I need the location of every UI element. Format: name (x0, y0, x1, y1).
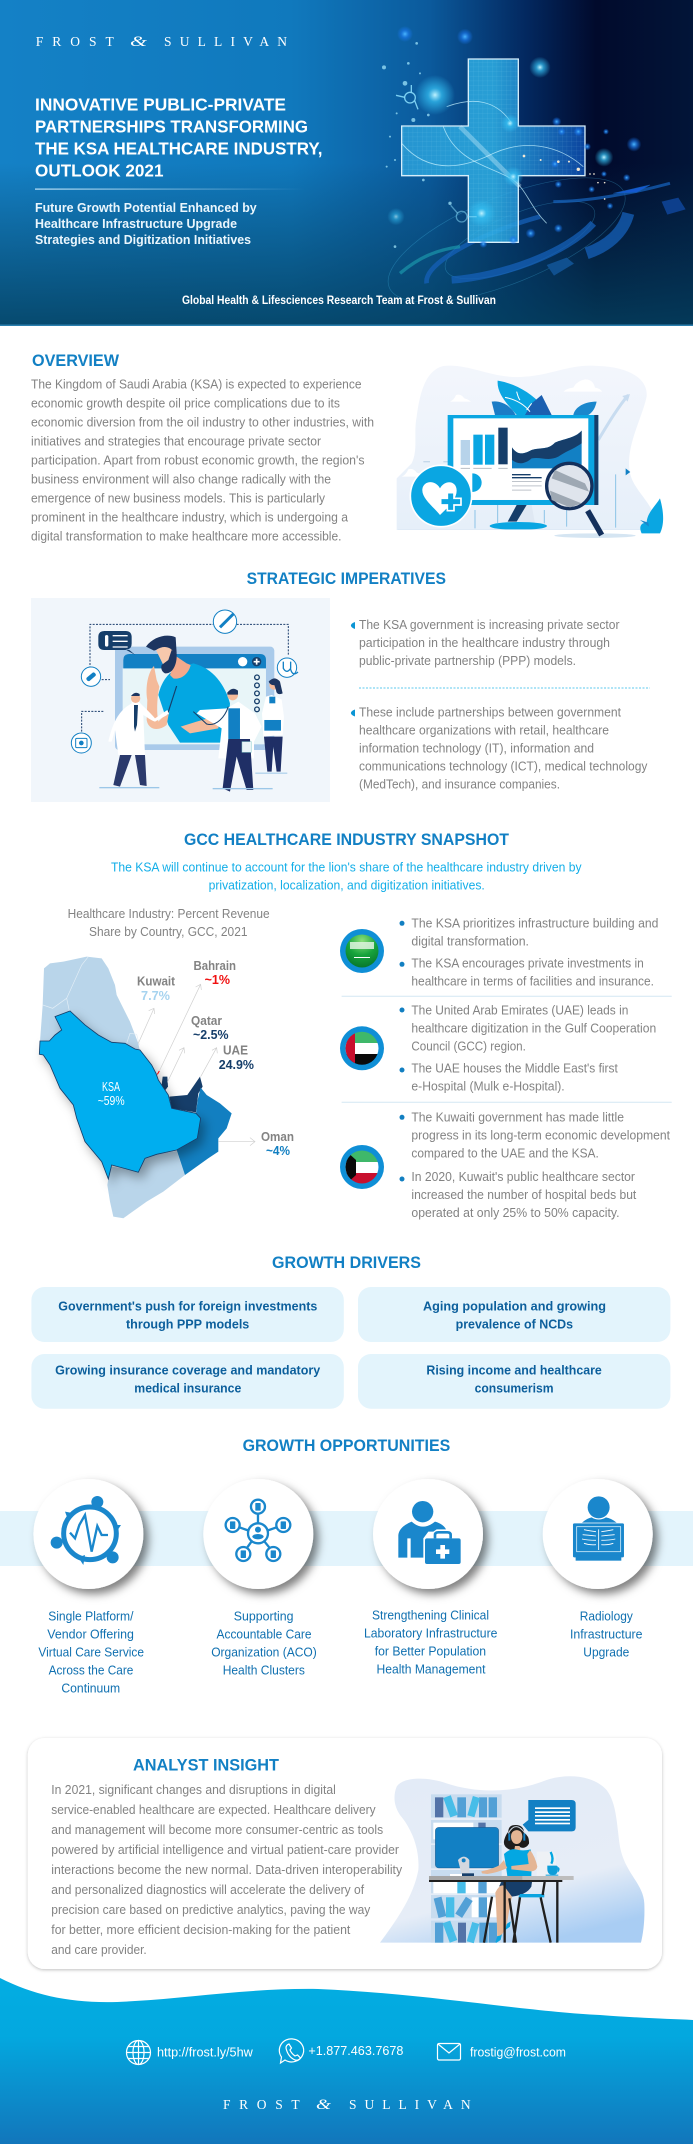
text block: overview body (31, 377, 374, 543)
country row: UAE: e-Hospital (Mulk e-Hospital). (411, 1079, 565, 1093)
label: Laboratory Infrastructure (364, 1626, 497, 1640)
label: Infrastructure (570, 1628, 643, 1642)
country row: Kuwait: operated at only 25% to 50% capacity. (411, 1206, 620, 1220)
label: Qatar (191, 1014, 228, 1042)
icon: globe (126, 2040, 150, 2064)
contact: email: frostig@frost.com (470, 2046, 566, 2060)
subtitle: Healthcare Infrastructure Upgrade (35, 216, 237, 231)
contact: website: http://frost.ly/5hw (157, 2046, 254, 2060)
logo: Frost & Sullivan footer: SULLIVAN (349, 2097, 471, 2112)
text block: analyst insight body: and management will become more consumer-centric as tools (51, 1823, 383, 1837)
label (364, 1608, 497, 1676)
bullet: PPP models: The KSA government is increasing private sector (359, 618, 620, 632)
label: Continuum (61, 1682, 120, 1696)
subtitle: Strategies and Digitization Initiatives (35, 232, 251, 247)
card: foreign investments (31, 1287, 344, 1342)
icon: doctor with medical case (373, 1479, 483, 1589)
country row: UAE: The United Arab Emirates (UAE) leads in (411, 1003, 628, 1017)
subtitle: Future Growth Potential Enhanced by (35, 200, 257, 215)
card: insurance coverage (31, 1354, 344, 1409)
title: PARTNERSHIPS TRANSFORMING (35, 117, 308, 137)
label: Supporting (234, 1610, 294, 1624)
panel: overview (31, 351, 663, 543)
country row: Kuwait: In 2020, Kuwait's public healthcare sector (411, 1170, 635, 1184)
label: Qatar: ~2.5% (193, 1028, 228, 1042)
icon: radiologist with x-ray (543, 1479, 653, 1589)
country row: Kuwait: progress in its long-term economic development (411, 1128, 670, 1142)
logo: Frost & Sullivan: & (130, 34, 147, 50)
card: rising income: consumerism (475, 1381, 554, 1395)
logo: Frost & Sullivan footer (223, 2097, 471, 2113)
logo: Frost & Sullivan footer: FROST (223, 2097, 300, 2112)
label: Upgrade (583, 1646, 629, 1660)
label: Kuwait (137, 975, 176, 1003)
country row: KSA: healthcare in terms of facilities and insurance. (411, 975, 654, 989)
text block: analyst insight body: interactions become the new normal. Data-driven interoperability (51, 1863, 403, 1877)
card: rising income (358, 1354, 670, 1409)
contact: website (126, 2040, 254, 2064)
label: UAE: UAE (223, 1044, 248, 1058)
subheading: privatization, localization, and digitization initiatives. (209, 879, 485, 893)
illustration: glowing medical cross (373, 26, 686, 328)
label: Kuwait: 7.7% (141, 989, 170, 1003)
card: aging population: Aging population and growing (423, 1300, 606, 1314)
text block: overview body: business environment will also change radically with the (31, 472, 331, 486)
label: Radiology (580, 1610, 634, 1624)
panel: strategic imperatives (31, 569, 650, 802)
card: rising income: Rising income and healthcare (426, 1363, 602, 1377)
illustration: telehealth window with doctors (31, 598, 330, 802)
opportunity: radiology (543, 1479, 653, 1660)
label: Bahrain: Bahrain (194, 959, 236, 973)
card: insurance coverage: medical insurance (134, 1381, 241, 1395)
title (35, 94, 322, 181)
country row: UAE (340, 1003, 656, 1093)
heading: strategic imperatives: STRATEGIC IMPERATIVES (247, 569, 446, 588)
subtitle (35, 200, 257, 247)
label: UAE (219, 1044, 254, 1072)
label: KSA: ~59% (98, 1094, 125, 1108)
bullet: partnerships: These include partnerships between government (359, 706, 621, 720)
map: GCC revenue share (39, 957, 294, 1218)
heading: growth drivers: GROWTH DRIVERS (272, 1253, 421, 1272)
title: INNOVATIVE PUBLIC-PRIVATE (35, 94, 286, 114)
illustration: analytics monitor with heart and magnifier (397, 366, 663, 538)
heading: overview: OVERVIEW (32, 351, 120, 370)
text block: analyst insight body: In 2021, significant changes and disruptions in digital (51, 1783, 336, 1797)
label: Across the Care (49, 1664, 133, 1678)
country row: UAE: healthcare digitization in the Gulf Cooperation (411, 1021, 656, 1035)
country row: Kuwait: compared to the UAE and the KSA. (411, 1146, 599, 1160)
logo: Frost & Sullivan (36, 34, 287, 50)
opportunity: virtual care (33, 1479, 144, 1696)
label: Health Management (376, 1662, 486, 1676)
label: Bahrain: ~1% (205, 973, 230, 987)
logo: Frost & Sullivan footer: & (316, 2097, 331, 2113)
heading: analyst insight: ANALYST INSIGHT (133, 1756, 280, 1775)
chart title: Share by Country, GCC, 2021 (89, 925, 248, 939)
subheading (111, 861, 582, 893)
icon: Saudi flag (340, 929, 384, 973)
text block: overview body: participation. Apart from robust economic growth, the region's (31, 453, 364, 467)
contact: email (438, 2044, 566, 2060)
title: THE KSA HEALTHCARE INDUSTRY, (35, 139, 322, 159)
text block: overview body: digital transformation to make healthcare more accessible. (31, 529, 342, 543)
bullet: PPP models (351, 618, 620, 668)
research team credit: Global Health & Lifesciences Research Team at Frost & Sullivan (182, 293, 496, 307)
panel: hero banner (0, 0, 693, 328)
card: aging population (358, 1287, 670, 1342)
label: Accountable Care (216, 1628, 312, 1642)
contact: phone: +1.877.463.7678 (308, 2044, 403, 2058)
card: aging population: prevalence of NCDs (456, 1318, 573, 1332)
bullet: PPP models: participation in the healthcare industry through (359, 636, 610, 650)
label (38, 1610, 144, 1696)
bullet: partnerships (351, 706, 648, 792)
text block: overview body: emergence of new business models. This is particularly (31, 491, 326, 505)
text block: overview body: prominent in the healthcare industry, which is undergoing a (31, 510, 348, 524)
label: Strengthening Clinical (372, 1608, 489, 1622)
text block: analyst insight body: for better, more efficient decision-making for the patient (51, 1923, 351, 1937)
label: UAE: 24.9% (219, 1058, 254, 1072)
panel: GCC healthcare industry snapshot (39, 830, 672, 1220)
icon: UAE flag (340, 1026, 384, 1070)
text block: analyst insight body: service-enabled healthcare are expected. Healthcare delivery (51, 1803, 376, 1817)
label: Health Clusters (223, 1664, 305, 1678)
illustration: call-centre analyst at desk (380, 1776, 644, 1943)
contact: phone (279, 2039, 403, 2063)
label: Oman (261, 1130, 294, 1158)
label: Bahrain (194, 959, 236, 987)
chart title (68, 907, 270, 939)
bullet: partnerships: healthcare organizations with retail, healthcare (359, 724, 609, 738)
chart title: Healthcare Industry: Percent Revenue (68, 907, 270, 921)
bullet: partnerships: communications technology (ICT), medical technology (359, 760, 648, 774)
panel: growth opportunities (0, 1436, 693, 1696)
country row: KSA: digital transformation. (411, 935, 529, 949)
subheading: The KSA will continue to account for the lion's share of the healthcare industry driven by (111, 861, 582, 875)
label (211, 1610, 317, 1678)
panel: growth drivers (31, 1253, 670, 1409)
icon: Kuwait flag (340, 1145, 384, 1189)
country row: Kuwait: increased the number of hospital beds but (411, 1188, 637, 1202)
text block: analyst insight body: and personalized diagnostics will accelerate the delivery of (51, 1883, 365, 1897)
icon: pulse cycle (33, 1479, 143, 1589)
bullet: partnerships: information technology (IT), information and (359, 742, 594, 756)
text block: analyst insight body: and care provider. (51, 1943, 147, 1957)
opportunity: clinical laboratory (364, 1479, 497, 1676)
text block: overview body: The Kingdom of Saudi Arabia (KSA) is expected to experience (31, 377, 362, 391)
bullet: partnerships: (MedTech), and insurance companies. (359, 778, 560, 792)
label: Single Platform/ (48, 1610, 134, 1624)
label (570, 1610, 643, 1660)
country row: Kuwait: The Kuwaiti government has made little (411, 1110, 624, 1124)
icon: network hub (203, 1479, 313, 1589)
text block: overview body: economic growth despite oil price complications due to its (31, 396, 340, 410)
card: foreign investments: Government's push for foreign investments (58, 1300, 317, 1314)
logo: Frost & Sullivan: SULLIVAN (164, 34, 287, 49)
heading: GCC snapshot: GCC HEALTHCARE INDUSTRY SNAPSHOT (184, 830, 510, 849)
text block: analyst insight body (51, 1783, 403, 1957)
heading: growth opportunities: GROWTH OPPORTUNITIES (243, 1436, 450, 1455)
label: Vendor Offering (47, 1628, 134, 1642)
country row: Kuwait (340, 1110, 670, 1220)
country row: KSA: The KSA encourages private investments in (411, 957, 644, 971)
bullet: PPP models: public-private partnership (PPP) models. (359, 654, 576, 668)
country row: UAE: Council (GCC) region. (411, 1039, 526, 1053)
label: KSA: KSA (102, 1080, 120, 1094)
label: Kuwait: Kuwait (137, 975, 176, 989)
text block: analyst insight body: precision care based on predictive analytics, paving the way (51, 1903, 371, 1917)
panel: footer (0, 1978, 693, 2144)
label: Qatar: Qatar (191, 1014, 222, 1028)
panel: analyst insight (28, 1738, 662, 1969)
logo: Frost & Sullivan: FROST (36, 34, 115, 49)
label: Organization (ACO) (211, 1646, 317, 1660)
text block: overview body: initiatives and strategies that encourage private sector (31, 434, 321, 448)
label: for Better Population (375, 1644, 486, 1658)
card: insurance coverage: Growing insurance coverage and mandatory (55, 1363, 320, 1377)
opportunity: accountable care (203, 1479, 317, 1678)
icon: phone bubble (279, 2039, 304, 2063)
text block: analyst insight body: powered by artificial intelligence and virtual patient-care provider (51, 1843, 399, 1857)
title: OUTLOOK 2021 (35, 161, 164, 181)
label: Oman: ~4% (266, 1144, 290, 1158)
text block: overview body: economic diversion from the oil industry to other industries, with (31, 415, 374, 429)
icon: envelope (438, 2044, 460, 2060)
card: foreign investments: through PPP models (126, 1318, 249, 1332)
label: KSA (98, 1080, 125, 1108)
label: Oman: Oman (261, 1130, 294, 1144)
country row: KSA: The KSA prioritizes infrastructure building and (411, 917, 658, 931)
country row: KSA (340, 917, 658, 989)
label: Virtual Care Service (38, 1646, 144, 1660)
country row: UAE: The UAE houses the Middle East's first (411, 1061, 618, 1075)
